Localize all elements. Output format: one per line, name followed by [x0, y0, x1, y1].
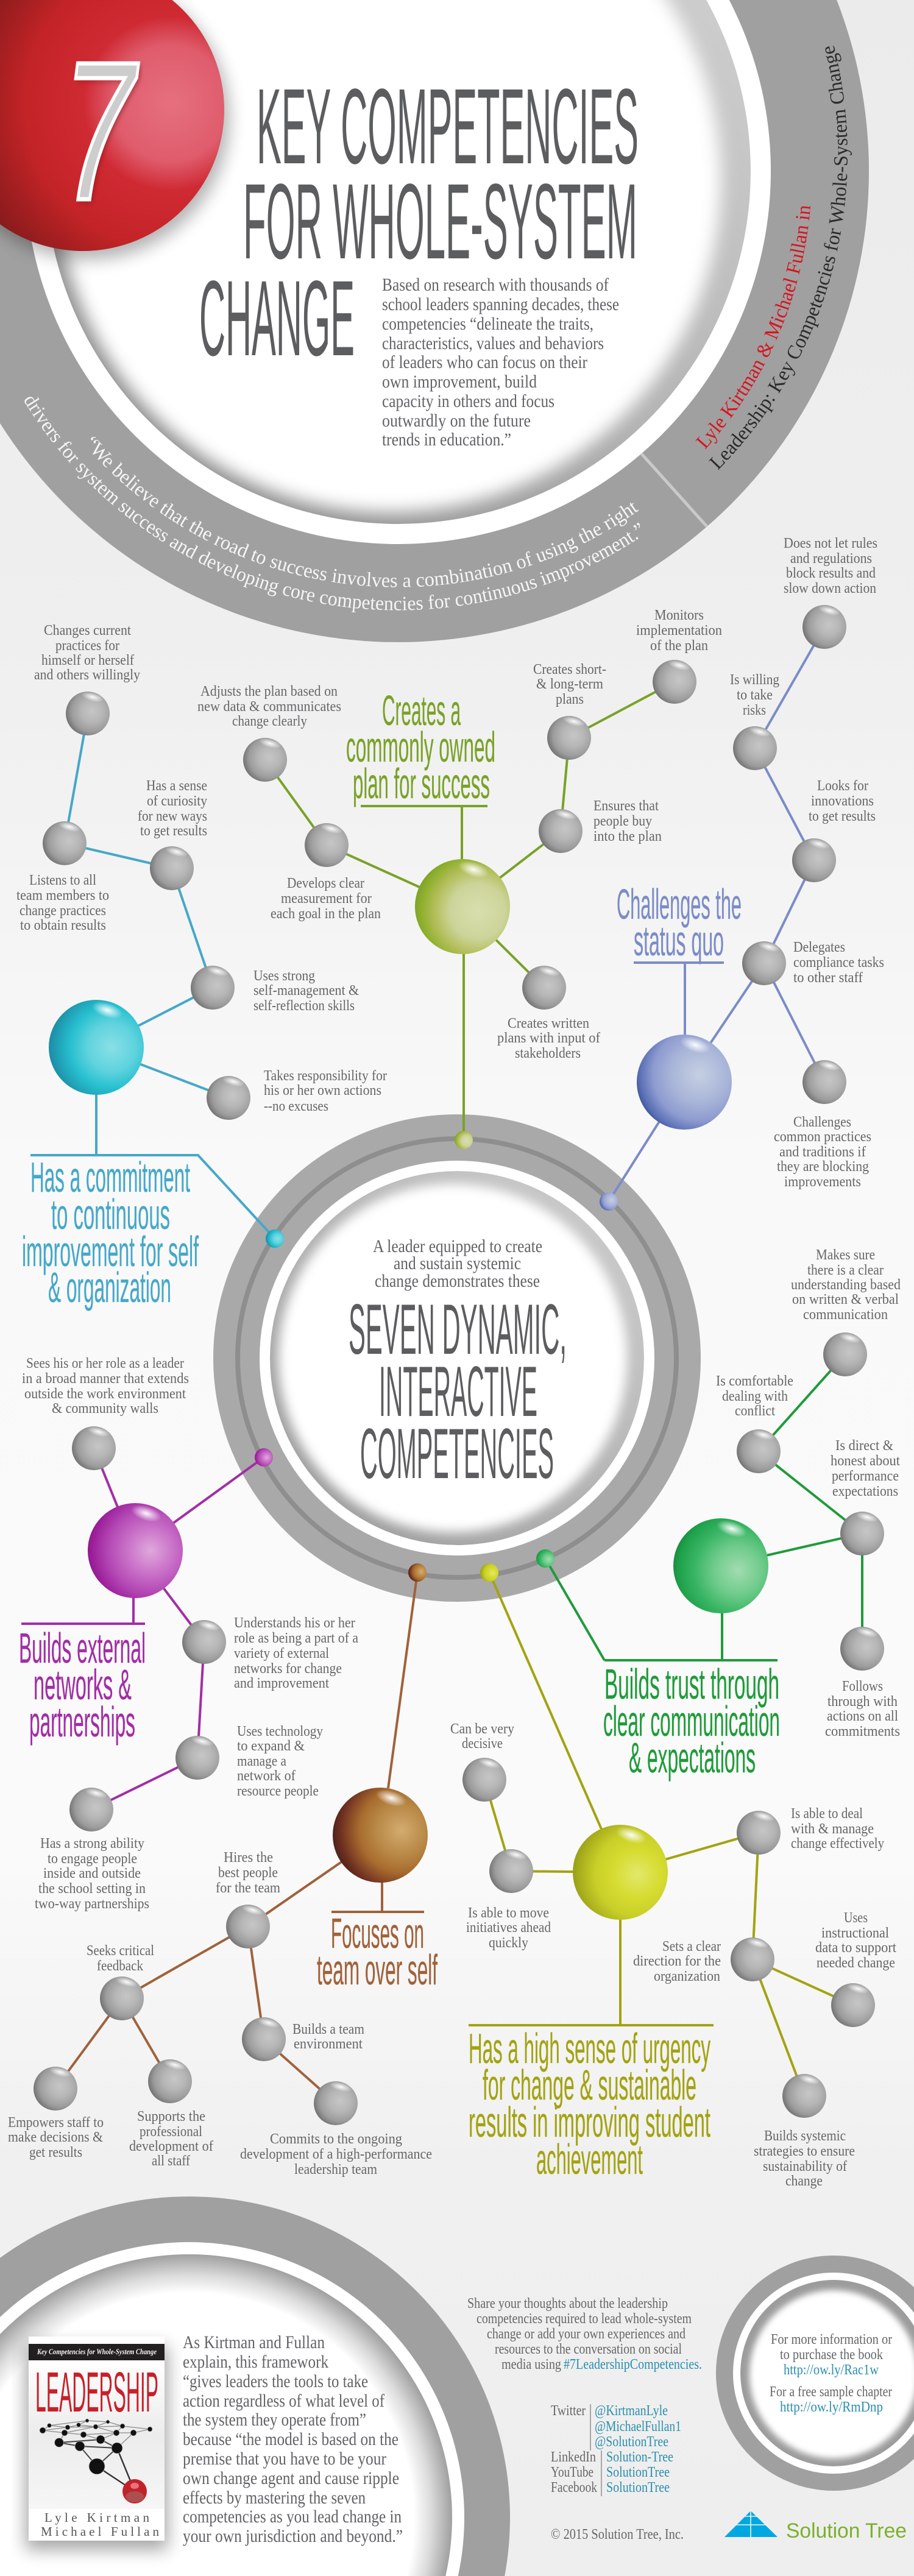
- ring marker: [455, 1131, 473, 1149]
- node: hires the best: for the team: [216, 1880, 280, 1896]
- node: seeks feedback: feedback: [97, 1958, 143, 1974]
- connector lines: [265, 682, 675, 1140]
- share call-to-action text: resources to the conversation on social: [495, 2341, 682, 2357]
- book network illustration: [40, 2419, 152, 2503]
- node: systemic strategies: sustainability of: [763, 2159, 847, 2174]
- node: uses technology: Uses technology: [237, 1724, 323, 1739]
- node: adjusts the plan: [197, 684, 341, 782]
- node: very decisive: Can be very: [450, 1721, 514, 1737]
- node: empowers staff: Empowers staff to: [8, 2115, 104, 2131]
- shaded inner disc: [0, 2254, 452, 2576]
- node: engage people: the school setting in: [38, 1881, 146, 1897]
- node: people buy in: people buy: [593, 813, 652, 829]
- node: engage people: to engage people: [48, 1851, 137, 1867]
- panel: builds trust (green): [536, 1247, 901, 1782]
- ring marker: [480, 1563, 498, 1582]
- node: hires the best: Hires the: [224, 1850, 273, 1866]
- social media links: LinkedIn: [551, 2449, 596, 2465]
- node: challenges common practices: improvements: [784, 1174, 861, 1190]
- social media links: @KirtmanLyle: [595, 2403, 668, 2419]
- node: external networks: Understands his or her: [234, 1615, 355, 1631]
- node: delegates compliance: [742, 939, 884, 986]
- text: team over self: [317, 1946, 438, 1994]
- node: clear understanding: understanding based: [791, 1277, 901, 1293]
- node: changes current practices: and others willingly: [34, 667, 140, 683]
- node: delegates compliance: compliance tasks: [793, 955, 884, 971]
- node: looks for innovations: Looks for: [817, 778, 868, 794]
- node: moves initiatives: quickly: [489, 1935, 528, 1951]
- panel: commitment to continuous improvement (cyan): Has a commitment: [30, 1153, 190, 1201]
- node: adjusts the plan: change clearly: [232, 713, 307, 729]
- share call-to-action text: Share your thoughts about the leadership: [467, 2296, 668, 2312]
- node: challenges common practices: Challenges: [793, 1114, 851, 1130]
- node: empowers staff: get results: [29, 2145, 82, 2160]
- node: empowers staff: make decisions &: [8, 2129, 103, 2145]
- panel: more information ring: [716, 2256, 914, 2491]
- central intro text: A leader equipped to create: [373, 1236, 542, 1256]
- social media links: [551, 2403, 681, 2496]
- connector lines: [55, 1573, 424, 2103]
- panel: commitment to continuous improvement (cyan): [16, 623, 387, 1311]
- node: supports development: all staff: [152, 2153, 190, 2169]
- node: uses technology: [175, 1724, 323, 1799]
- social media links: @MichaelFullan1: [595, 2419, 681, 2435]
- node: instructional data: data to support: [815, 1940, 896, 1956]
- node: systemic strategies: change: [785, 2173, 823, 2189]
- panel: builds external networks (purple): [19, 1356, 358, 1912]
- node: willing to take risks: risks: [743, 702, 766, 718]
- more information text: http://ow.ly/Rac1w: [784, 2362, 879, 2378]
- text: Focuses on: [331, 1909, 424, 1957]
- main sphere: [333, 1786, 428, 1883]
- node: dealing with conflict: [716, 1373, 793, 1473]
- social media links: Facebook: [551, 2480, 597, 2496]
- wordmark: Solution Tree: [786, 2519, 907, 2542]
- node: sense of curiosity: for new ways: [138, 809, 207, 824]
- heading: Creates a: [382, 687, 461, 734]
- node: clear understanding: there is a clear: [807, 1262, 884, 1278]
- node: instructional data: Uses: [844, 1910, 868, 1926]
- node: external networks: and improvement: [234, 1675, 329, 1691]
- node: builds team environment: Builds a team: [292, 2022, 364, 2037]
- more information text: [770, 2332, 892, 2415]
- book subtitle: Key Competencies for Whole-System Change: [37, 2347, 157, 2356]
- node: rules and regulations: slow down action: [784, 581, 876, 596]
- book description text: because “the model is based on the: [183, 2429, 399, 2449]
- shaded inner disc: [45, 0, 751, 524]
- node: uses technology: manage a: [237, 1753, 286, 1769]
- node: written plans: plans with input of: [497, 1030, 600, 1046]
- intro text block: capacity in others and focus: [382, 391, 554, 411]
- book description text: premise that you have to be your: [183, 2449, 386, 2469]
- node: broad role: [22, 1356, 189, 1470]
- intro text block: own improvement, build: [382, 372, 537, 392]
- node: takes responsibility: [207, 1068, 387, 1120]
- node: supports development: development of: [129, 2139, 213, 2154]
- node: takes responsibility: Takes responsibility for: [264, 1068, 387, 1084]
- intro text block: outwardly on the future: [382, 411, 531, 431]
- share call-to-action text: media using: [501, 2357, 561, 2373]
- node: manages change: [737, 1806, 884, 1855]
- panel: challenges the status quo (blue): [600, 536, 884, 1211]
- panel: central ring: INTERACTIVE: [379, 1351, 537, 1431]
- more information text: For more information or: [771, 2332, 892, 2348]
- book authors: Michael Fullan: [41, 2524, 160, 2539]
- main sphere: [673, 1517, 768, 1613]
- node: people buy in: [539, 798, 662, 853]
- node: adjusts the plan: new data & communicates: [197, 699, 341, 715]
- shaded inner disc: [270, 1171, 644, 1545]
- node: challenges common practices: common practices: [774, 1129, 871, 1145]
- panel: builds external networks (purple): Builds external: [19, 1624, 146, 1672]
- node: sense of curiosity: of curiosity: [147, 793, 207, 809]
- node: builds team environment: [242, 2015, 364, 2061]
- intro text block: of leaders who can focus on their: [382, 352, 587, 372]
- node: takes responsibility: --no excuses: [264, 1099, 328, 1114]
- node: instructional data: needed change: [817, 1955, 895, 1971]
- node: written plans: [497, 964, 600, 1061]
- node: empowers staff: [8, 2065, 104, 2160]
- node: looks for innovations: [792, 778, 876, 882]
- connector lines: [469, 1573, 853, 2096]
- node: clear measurement: each goal in the plan: [271, 906, 381, 922]
- node: rules and regulations: and regulations: [790, 551, 872, 567]
- central intro text: and sustain systemic: [394, 1253, 521, 1273]
- node: clear understanding: [791, 1247, 901, 1376]
- connector lines: [609, 627, 824, 1201]
- intro text block: trends in education.”: [382, 430, 511, 450]
- book authors: [41, 2510, 160, 2539]
- book shadow: [26, 2346, 168, 2550]
- node: instructional data: instructional: [821, 1925, 889, 1941]
- main sphere: [415, 858, 510, 954]
- panel: central ring: COMPETENCIES: [360, 1414, 554, 1493]
- icon: red ball with number 7: [0, 0, 229, 260]
- node: ongoing development: Commits to the ongoing: [270, 2131, 402, 2147]
- node: engage people: Has a strong ability: [40, 1836, 144, 1852]
- node: builds team environment: environment: [294, 2036, 363, 2052]
- share call-to-action text: #7LeadershipCompetencies.: [564, 2357, 702, 2373]
- book description text: As Kirtman and Fullan: [183, 2332, 325, 2352]
- central intro text: change demonstrates these: [375, 1271, 540, 1291]
- node: hires the best: best people: [218, 1865, 278, 1881]
- node: monitors implementation: Monitors: [654, 607, 704, 623]
- node: ongoing development: leadership team: [294, 2162, 377, 2178]
- panel: commonly owned plan (olive): [197, 607, 722, 1149]
- heading: [346, 687, 495, 807]
- ring marker: [408, 1563, 427, 1582]
- node: listens to team: change practices: [19, 903, 106, 919]
- node: external networks: [182, 1615, 358, 1691]
- book description text: the system they operate from”: [183, 2410, 366, 2430]
- node: broad role: in a broad manner that extends: [22, 1371, 189, 1387]
- node: direct and honest: honest about: [831, 1453, 900, 1469]
- node: sets clear direction: Sets a clear: [662, 1939, 721, 1955]
- icon: pyramid tree: [724, 2510, 778, 2539]
- heading: [617, 880, 742, 964]
- node: follows through: Follows: [842, 1679, 883, 1694]
- node: very decisive: [450, 1721, 514, 1802]
- node: dealing with conflict: Is comfortable: [716, 1373, 793, 1389]
- social media links: YouTube: [551, 2465, 593, 2480]
- node: short and long-term plans: & long-term: [536, 676, 603, 692]
- node: follows through: [825, 1625, 900, 1739]
- book description text: competencies as you lead change in: [183, 2507, 402, 2527]
- heading: [22, 1153, 199, 1311]
- node: people buy in: into the plan: [593, 829, 662, 844]
- node: ongoing development: [240, 2079, 432, 2178]
- book description text: your own jurisdiction and beyond.”: [183, 2526, 403, 2546]
- node: looks for innovations: to get results: [809, 809, 876, 824]
- node: direct and honest: [831, 1438, 900, 1555]
- book description text: “gives leaders the tools to take: [183, 2371, 368, 2391]
- intro text block: school leaders spanning decades, these: [382, 294, 619, 314]
- book description text: action regardless of what level of: [183, 2391, 384, 2411]
- panel: commonly owned plan (olive): plan for success: [353, 760, 490, 807]
- intro text block: Based on research with thousands of: [382, 275, 609, 295]
- node: rules and regulations: block results and: [786, 565, 876, 581]
- node: engage people: two-way partnerships: [35, 1896, 149, 1912]
- intro text block: [382, 275, 619, 450]
- node: monitors implementation: [636, 607, 722, 704]
- social media links: Solution-Tree: [606, 2449, 673, 2465]
- node: self-management: [191, 964, 359, 1014]
- node: clear measurement: Develops clear: [287, 876, 364, 891]
- ring marker: [536, 1549, 554, 1568]
- node: broad role: outside the work environment: [24, 1386, 186, 1402]
- ring marker: [266, 1230, 284, 1248]
- node: dealing with conflict: conflict: [735, 1403, 775, 1419]
- share call-to-action text: competencies required to lead whole-system: [476, 2311, 692, 2327]
- node: sense of curiosity: to get results: [140, 823, 207, 839]
- node: sense of curiosity: Has a sense: [146, 778, 207, 794]
- node: clear measurement: measurement for: [281, 891, 372, 907]
- book title on ring: Leadership: Key Competencies for Whole-System Change: [709, 46, 852, 470]
- node: direct and honest: performance: [832, 1468, 899, 1484]
- heading: & organization: [48, 1264, 171, 1311]
- heading: networks &: [34, 1661, 132, 1708]
- node: short and long-term plans: Creates short-: [533, 662, 606, 678]
- main sphere: [573, 1824, 668, 1920]
- node: challenges common practices: and traditions if: [779, 1144, 866, 1160]
- node: seeks feedback: [87, 1943, 154, 2020]
- share call-to-action text: change or add your own experiences and: [487, 2326, 685, 2342]
- quote on ring: “We believe that the road to success involves a combination of using the right: [91, 437, 639, 587]
- number 7 shadow: 7: [65, 24, 142, 244]
- node: ongoing development: development of a high-performance: [240, 2146, 432, 2162]
- node: clear measurement: [271, 821, 381, 922]
- title: [199, 67, 639, 378]
- book description text: explain, this framework: [183, 2352, 328, 2372]
- heading: achievement: [536, 2135, 643, 2183]
- node: sets clear direction: [633, 1936, 774, 1984]
- node: willing to take risks: Is willing: [730, 672, 779, 688]
- heading: [19, 1624, 146, 1746]
- node: manages change: with & manage: [791, 1821, 874, 1837]
- node: short and long-term plans: [533, 662, 606, 760]
- node: adjusts the plan: Adjusts the plan based on: [200, 684, 338, 699]
- node: sets clear direction: direction for the: [633, 1953, 721, 1969]
- ring marker: [255, 1448, 273, 1467]
- node: listens to team: [16, 819, 109, 933]
- heading: to continuous: [51, 1191, 170, 1238]
- node: broad role: Sees his or her role as a leader: [26, 1356, 184, 1371]
- node: self-management: self-reflection skills: [253, 998, 355, 1014]
- panel: sense of urgency (yellow): [450, 1563, 896, 2189]
- panel: footer book ring: [0, 2196, 510, 2576]
- number 7: 7: [62, 21, 140, 242]
- node: external networks: networks for change: [234, 1661, 342, 1677]
- heading: [317, 1909, 438, 1994]
- node: instructional data: [815, 1910, 896, 2027]
- node: external networks: variety of external: [234, 1646, 329, 1661]
- book description text: effects by mastering the seven: [183, 2488, 366, 2508]
- node: challenges common practices: [774, 1058, 871, 1190]
- node: listens to team: Listens to all: [29, 872, 96, 888]
- node: uses technology: network of: [237, 1768, 296, 1784]
- intro text block: competencies “delineate the traits,: [382, 314, 593, 334]
- heading: [603, 1660, 780, 1782]
- node: changes current practices: Changes current: [44, 623, 131, 639]
- node: uses technology: to expand &: [237, 1738, 305, 1754]
- book authors: Lyle Kirtman: [44, 2510, 150, 2525]
- heading: status quo: [634, 917, 724, 964]
- node: manages change: change effectively: [791, 1836, 884, 1852]
- main sphere: [88, 1502, 183, 1598]
- title: CHANGE: [199, 259, 355, 378]
- node: clear understanding: communication: [803, 1307, 888, 1323]
- node: changes current practices: practices for: [55, 638, 119, 654]
- node: monitors implementation: implementation: [636, 623, 722, 639]
- node: looks for innovations: innovations: [811, 793, 874, 809]
- more information text: to purchase the book: [780, 2347, 883, 2363]
- node: moves initiatives: [466, 1847, 551, 1951]
- panel: commonly owned plan (olive): commonly owned: [346, 723, 495, 771]
- book description text: own change agent and cause ripple: [183, 2468, 399, 2488]
- node: moves initiatives: initiatives ahead: [466, 1920, 551, 1936]
- panel: header ring: [0, 0, 869, 642]
- social media links: @SolutionTree: [595, 2434, 668, 2450]
- heading: [469, 2025, 710, 2183]
- social media links: SolutionTree: [606, 2480, 670, 2496]
- node: systemic strategies: Builds systemic: [764, 2128, 846, 2144]
- book band: [29, 2344, 165, 2360]
- node: uses technology: resource people: [237, 1783, 319, 1799]
- panel: commitment to continuous improvement (cyan): improvement for self: [22, 1228, 199, 1275]
- shaded inner disc: [740, 2280, 914, 2466]
- node: changes current practices: [34, 623, 140, 735]
- ring divider: [642, 454, 707, 526]
- panel: footer book ring: LEADERSHIP: [35, 2360, 158, 2424]
- node: listens to team: to obtain results: [20, 918, 106, 933]
- heading: & expectations: [629, 1734, 756, 1782]
- node: takes responsibility: his or her own actions: [264, 1083, 381, 1099]
- panel: builds external networks (purple): partnerships: [29, 1698, 135, 1746]
- node: supports development: professional: [140, 2124, 202, 2140]
- panel: challenges the status quo (blue): Challenges the: [617, 880, 742, 928]
- node: challenges common practices: they are blocking: [777, 1159, 869, 1175]
- node: supports development: [129, 2058, 213, 2169]
- share call-to-action text: [467, 2296, 702, 2373]
- main sphere: [49, 999, 144, 1095]
- node: willing to take risks: [730, 672, 779, 770]
- node: delegates compliance: to other staff: [793, 970, 863, 986]
- node: systemic strategies: strategies to ensure: [754, 2143, 855, 2159]
- node: monitors implementation: of the plan: [650, 638, 708, 654]
- book cover: [29, 2337, 165, 2541]
- more information text: http://ow.ly/RmDnp: [780, 2399, 883, 2415]
- node: written plans: stakeholders: [515, 1046, 581, 1061]
- quote on ring, second line: drivers for system success and developing core competencies for continuous improvement.”: [24, 397, 640, 613]
- panel: central ring: [213, 1114, 701, 1602]
- node: supports development: Supports the: [137, 2109, 205, 2125]
- node: engage people: inside and outside: [43, 1866, 141, 1881]
- social media links: SolutionTree: [606, 2465, 670, 2480]
- node: rules and regulations: [784, 536, 877, 649]
- node: dealing with conflict: dealing with: [722, 1389, 788, 1404]
- node: self-management: Uses strong: [253, 968, 315, 984]
- node: very decisive: decisive: [462, 1736, 503, 1752]
- node: changes current practices: himself or herself: [41, 653, 134, 668]
- panel: focuses on team (brown): [8, 1563, 438, 2178]
- node: direct and honest: expectations: [832, 1484, 898, 1499]
- node: broad role: & community walls: [52, 1401, 158, 1417]
- node: rules and regulations: Does not let rules: [784, 536, 877, 551]
- node: willing to take risks: to take: [737, 687, 773, 703]
- authors on ring: Lyle Kirtman & Michael Fullan in: [696, 206, 810, 450]
- node: sense of curiosity: [138, 778, 207, 890]
- node: clear understanding: Makes sure: [816, 1247, 875, 1263]
- central intro text: [373, 1236, 542, 1291]
- copyright: © 2015 Solution Tree, Inc.: [551, 2527, 684, 2542]
- node: follows through: through with: [827, 1694, 898, 1710]
- connector lines: [21, 1448, 264, 1810]
- node: written plans: Creates written: [508, 1016, 589, 1031]
- intro text block: characteristics, values and behaviors: [382, 333, 604, 353]
- node: follows through: commitments: [825, 1724, 900, 1739]
- node: listens to team: team members to: [16, 888, 109, 904]
- node: manages change: Is able to deal: [791, 1806, 863, 1822]
- node: hires the best: [216, 1850, 280, 1948]
- node: systemic strategies: [754, 2072, 855, 2189]
- logo: Solution Tree: [724, 2510, 907, 2542]
- connector lines: [545, 1354, 862, 1660]
- node: engage people: [35, 1786, 149, 1912]
- main sphere: [637, 1033, 732, 1130]
- social media links: Twitter: [551, 2403, 586, 2419]
- node: people buy in: Ensures that: [593, 798, 659, 814]
- book description text: [183, 2332, 403, 2546]
- node: direct and honest: Is direct &: [835, 1438, 893, 1454]
- more information text: For a free sample chapter: [770, 2384, 892, 2400]
- node: seeks feedback: Seeks critical: [87, 1943, 154, 1959]
- node: moves initiatives: Is able to move: [468, 1905, 549, 1921]
- ring marker: [600, 1192, 618, 1211]
- node: follows through: actions on all: [827, 1708, 898, 1724]
- central heading: [349, 1289, 567, 1493]
- node: sets clear direction: organization: [654, 1969, 720, 1984]
- node: self-management: self-management &: [253, 983, 359, 999]
- node: clear understanding: on written & verbal: [792, 1292, 899, 1307]
- node: delegates compliance: Delegates: [793, 939, 845, 955]
- node: external networks: role as being a part of a: [234, 1630, 358, 1646]
- connector lines: [30, 713, 275, 1239]
- node: short and long-term plans: plans: [556, 692, 584, 707]
